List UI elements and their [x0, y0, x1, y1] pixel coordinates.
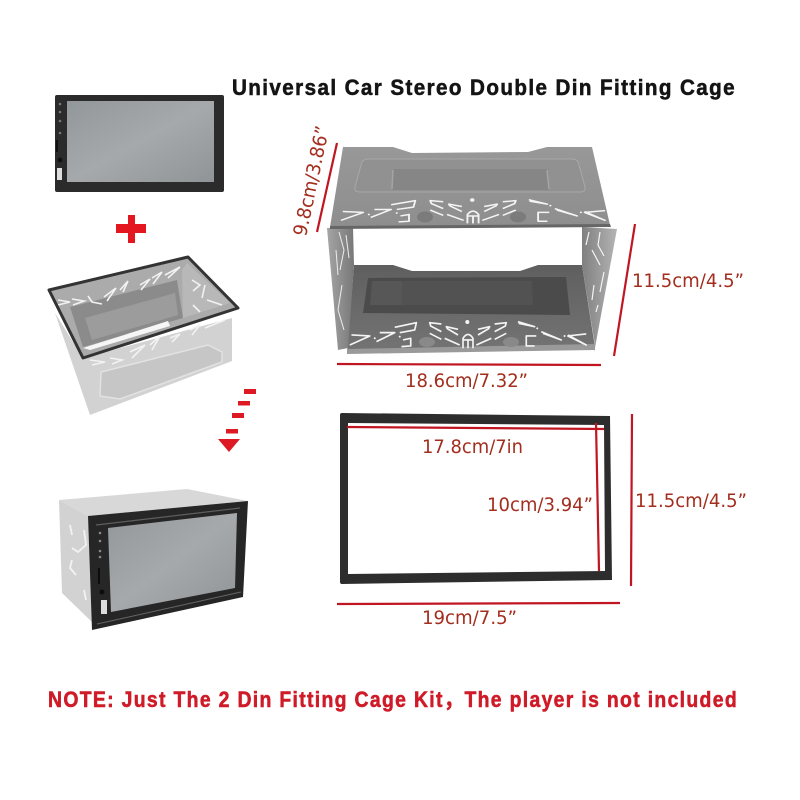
dimension: inner height 10cm [487, 423, 599, 571]
dimension: outer height 11.5cm: 11.5cm/4.5” [635, 490, 747, 512]
plus sign [116, 215, 146, 243]
car stereo unit [55, 95, 224, 192]
dimension: width 18.6cm: 18.6cm/7.32” [405, 370, 528, 392]
main cage [327, 147, 617, 354]
cage right side [582, 227, 617, 353]
assembled stereo in cage [59, 489, 248, 630]
dimension: outer width 19cm: 19cm/7.5” [422, 607, 517, 629]
cage left side [327, 227, 354, 350]
dimension: depth 9.8cm: 9.8cm/3.86” [289, 124, 334, 238]
dimension: height 11.5cm cage [614, 224, 744, 356]
dimension: inner width 17.8cm: 17.8cm/7in [422, 436, 523, 458]
cage bottom plate [347, 265, 595, 354]
dashed down arrow [218, 389, 256, 452]
dimension: inner height 10cm: 10cm/3.94” [487, 494, 593, 516]
title: Universal Car Stereo Double Din Fitting Cage [232, 75, 736, 100]
cage with fascia frame [49, 257, 238, 415]
fascia frame [340, 413, 612, 584]
dimension: height 11.5cm cage: 11.5cm/4.5” [632, 270, 744, 292]
cage top plate [330, 147, 611, 229]
